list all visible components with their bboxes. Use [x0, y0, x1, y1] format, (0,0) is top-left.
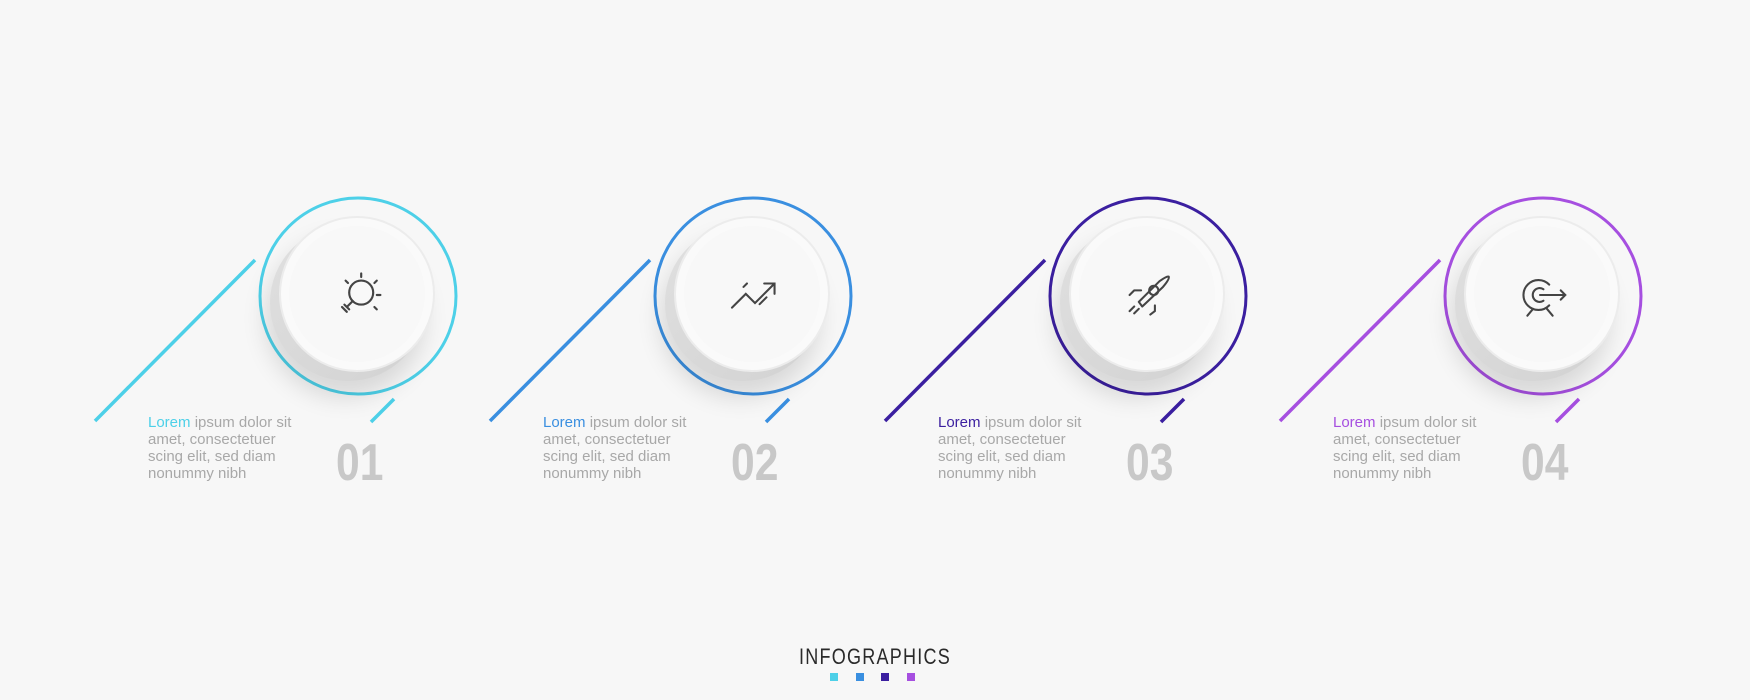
long line 03 — [885, 260, 1045, 421]
text 03: Lorem ipsum dolor sit — [938, 414, 1081, 431]
text 01: nonummy nibh — [148, 465, 246, 482]
text 03: scing elit, sed diam — [938, 448, 1066, 465]
long line 02 — [490, 260, 650, 421]
short line 04 — [1556, 399, 1579, 422]
long line 01 — [95, 260, 255, 421]
disc 04 — [1450, 217, 1619, 398]
disc 03 — [1055, 217, 1224, 398]
number 02: 02 — [731, 434, 778, 492]
ring 03 — [1050, 198, 1246, 394]
step 03 — [885, 198, 1246, 492]
title: INFOGRAPHICS — [799, 645, 951, 669]
number 01: 01 — [336, 434, 383, 492]
text 03: amet, consectetuer — [938, 431, 1066, 448]
text 02: nonummy nibh — [543, 465, 641, 482]
short line 01 — [371, 399, 394, 422]
ring 01 — [260, 198, 456, 394]
text 02: amet, consectetuer — [543, 431, 671, 448]
step 04 — [1280, 198, 1641, 492]
text 04: Lorem ipsum dolor sit — [1333, 414, 1476, 431]
number 03: 03 — [1126, 434, 1173, 492]
number 04: 04 — [1521, 434, 1569, 492]
short line 03 — [1161, 399, 1184, 422]
icon: bulb — [342, 273, 380, 312]
text 02: Lorem ipsum dolor sit — [543, 414, 686, 431]
icon: growth chart — [732, 284, 775, 308]
text 02: scing elit, sed diam — [543, 448, 671, 465]
short line 02 — [766, 399, 789, 422]
text 04: scing elit, sed diam — [1333, 448, 1461, 465]
step 01 — [95, 198, 456, 492]
ring 02 — [655, 198, 851, 394]
text 01: amet, consectetuer — [148, 431, 276, 448]
icon: rocket — [1130, 276, 1169, 315]
ring 04 — [1445, 198, 1641, 394]
disc 01 — [265, 217, 434, 398]
legend squares — [830, 673, 915, 681]
text 01: scing elit, sed diam — [148, 448, 276, 465]
icon: target — [1523, 280, 1565, 316]
step 02 — [490, 198, 851, 492]
text 01: Lorem ipsum dolor sit — [148, 414, 291, 431]
text 03: nonummy nibh — [938, 465, 1036, 482]
text 04: amet, consectetuer — [1333, 431, 1461, 448]
text 04: nonummy nibh — [1333, 465, 1431, 482]
long line 04 — [1280, 260, 1440, 421]
disc 02 — [660, 217, 829, 398]
